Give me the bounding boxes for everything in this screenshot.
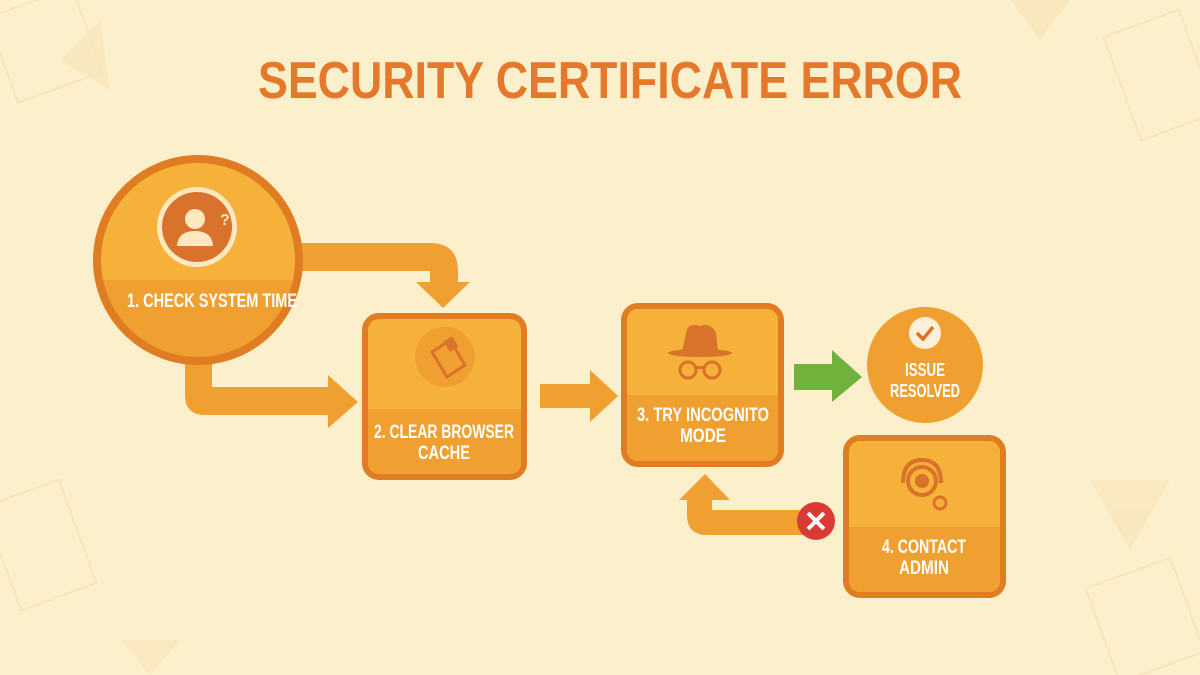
icon: check xyxy=(909,317,941,349)
arrow: admin back to step 3 xyxy=(679,474,805,535)
step 3: try incognito mode xyxy=(624,306,781,464)
icon: broom xyxy=(415,327,475,387)
step 3: try incognito mode: 3. TRY INCOGNITO xyxy=(637,405,769,426)
step 3: try incognito mode: MODE xyxy=(680,426,726,447)
step 4: contact admin: 4. CONTACT xyxy=(882,537,966,558)
issue resolved: ISSUE xyxy=(905,360,945,380)
icon: user question: ? xyxy=(220,212,230,229)
arrow: step 2 to step 3 xyxy=(540,370,618,422)
title: SECURITY CERTIFICATE ERROR xyxy=(258,52,962,110)
icon: user question xyxy=(157,187,237,267)
arrow: step 1 to step 2 (top) xyxy=(290,243,470,308)
arrow: step 1 to step 2 (bottom) xyxy=(185,345,358,428)
step 1: check system time xyxy=(90,159,310,380)
step 4: contact admin: ADMIN xyxy=(899,558,949,579)
icon: support gear xyxy=(903,460,946,509)
icon: incognito xyxy=(668,325,732,378)
step 2: clear browser cache xyxy=(365,316,524,477)
issue resolved xyxy=(867,307,983,423)
icon: red x xyxy=(797,502,835,540)
issue resolved: RESOLVED xyxy=(890,381,960,401)
step 2: clear browser cache: CACHE xyxy=(418,443,470,464)
step 4: contact admin xyxy=(846,438,1003,595)
step 1: check system time: 1. CHECK SYSTEM TIME xyxy=(127,291,297,312)
arrow: green to resolved xyxy=(794,350,862,402)
step 2: clear browser cache: 2. CLEAR BROWSER xyxy=(374,422,514,443)
